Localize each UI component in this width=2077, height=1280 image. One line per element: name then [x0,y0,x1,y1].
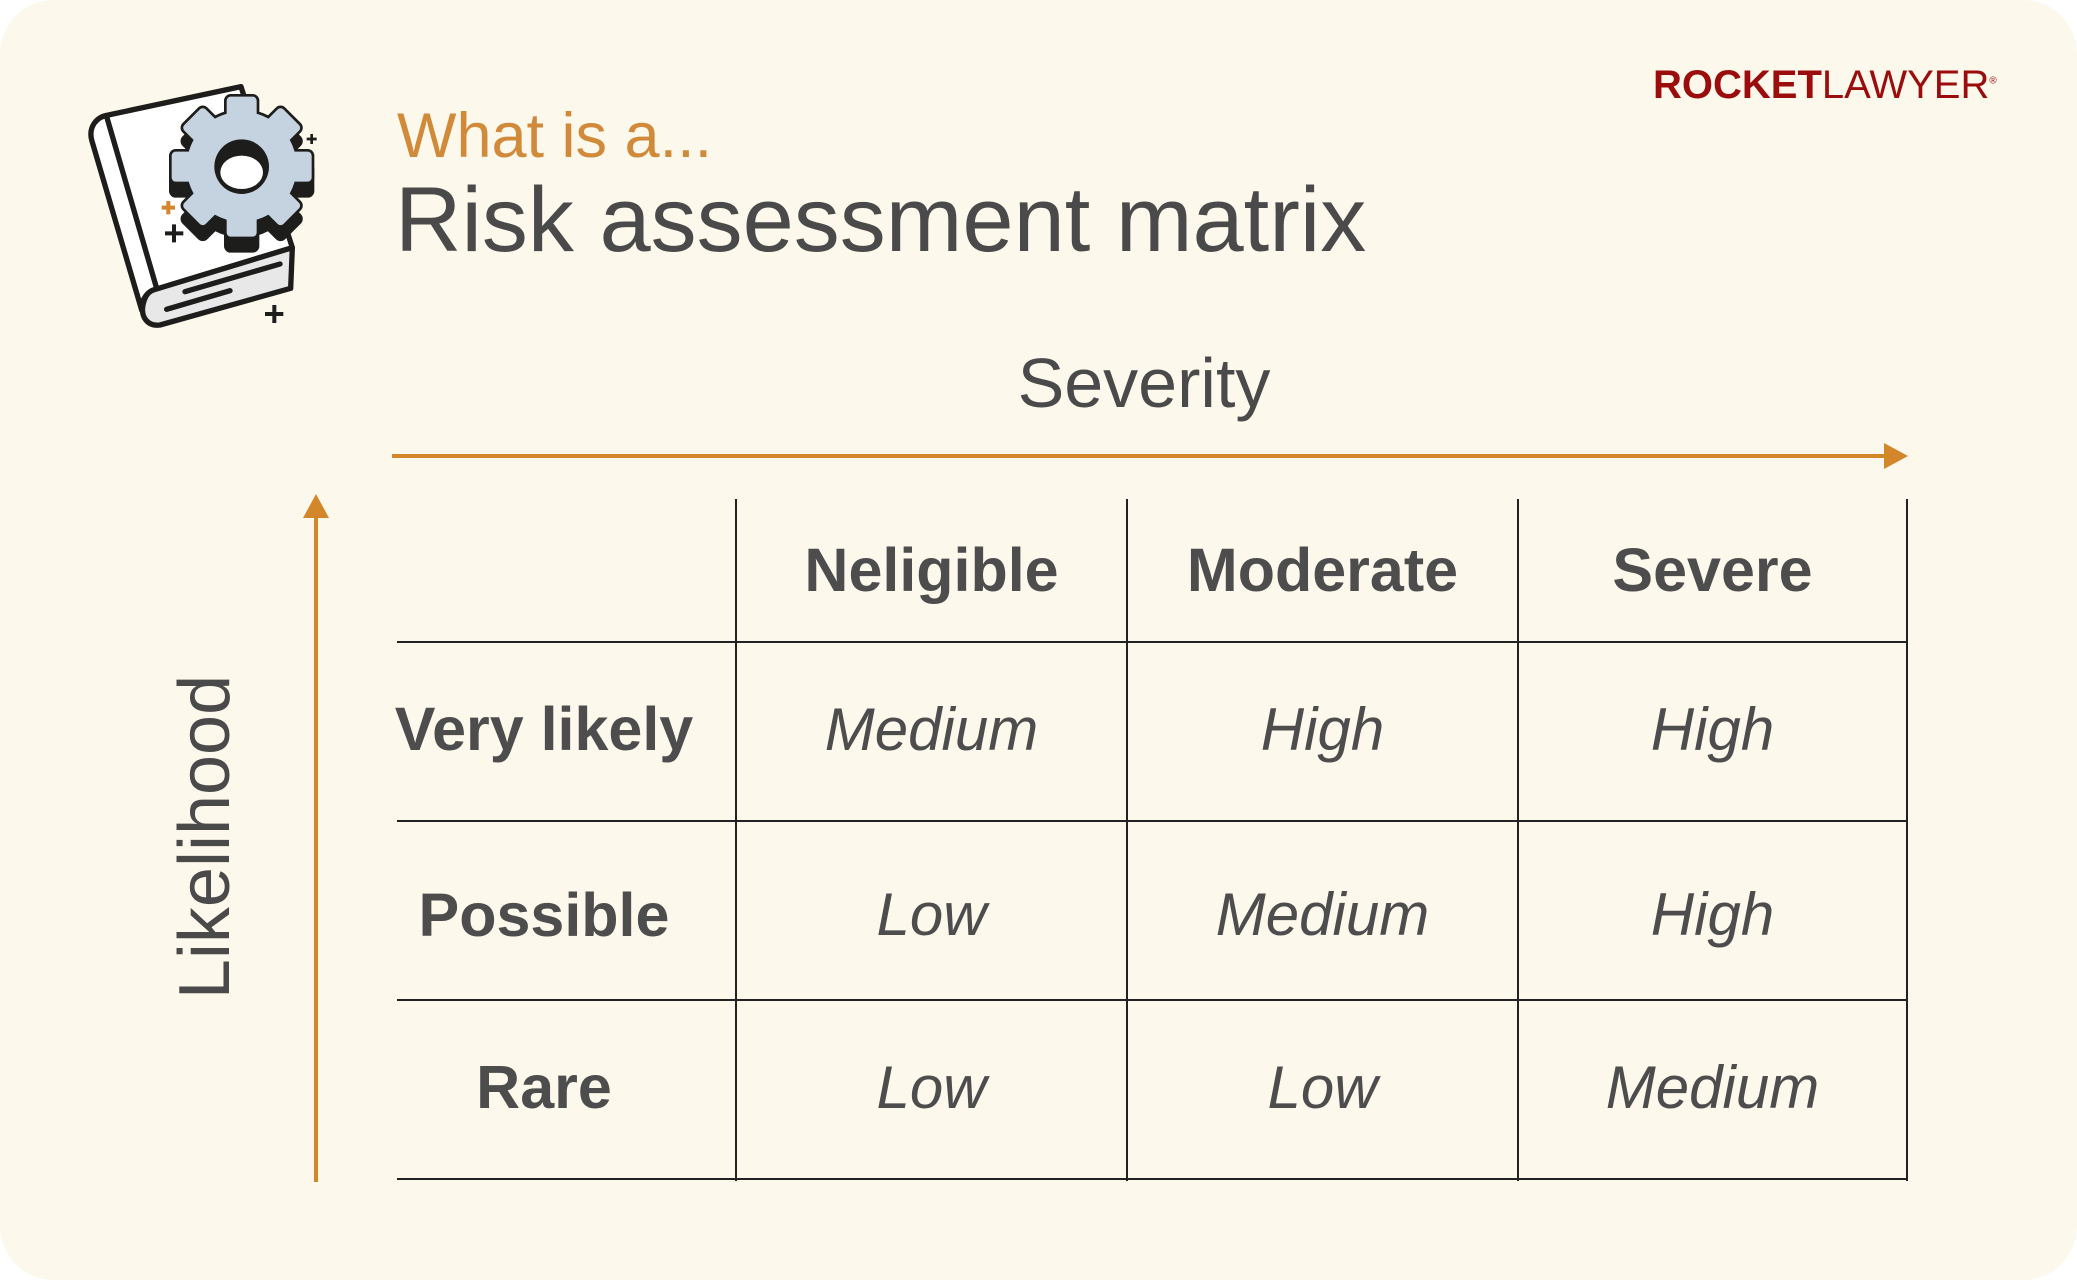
risk matrix table: Severe [1612,536,1813,604]
risk matrix table: Medium [1216,881,1429,948]
arrow: severity axis [392,443,1908,469]
risk matrix table: Low [876,881,987,948]
risk matrix table: Low [876,1054,987,1120]
risk matrix table: High [1651,881,1774,948]
arrow: likelihood axis [303,494,329,1182]
icon: book with gear [88,84,317,328]
risk matrix table: High [1651,696,1774,762]
risk matrix table: Low [1267,1054,1378,1120]
cells: Medium [825,696,1038,762]
risk matrix table: Rare [476,1053,612,1121]
risk matrix table: High [1261,696,1384,762]
row headers: Very likely [395,695,693,763]
logo: Rocket Lawyer: ROCKETLAWYER® [1653,63,1997,107]
risk matrix table: Possible [419,880,669,948]
axis label: likelihood: Likelihood [165,675,245,999]
subtitle: What is a... [397,101,712,171]
risk matrix table: Medium [1606,1054,1819,1120]
title: Risk assessment matrix [395,169,1366,271]
risk matrix table: Moderate [1187,536,1458,604]
column headers: Neligible [804,536,1059,604]
axis label: severity: Severity [1018,344,1270,422]
